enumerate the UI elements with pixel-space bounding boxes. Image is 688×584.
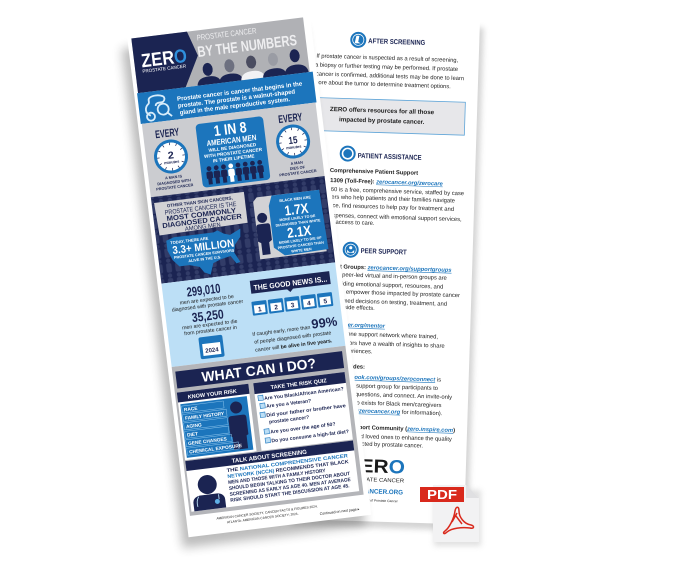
- stat: 299,010 diagnosed: 299,010: [186, 281, 221, 300]
- text block: support groups: to make informed decisions on testing, treatment, and: [309, 297, 447, 308]
- stats: 1.7x and 2.1x: 2.1X: [286, 222, 313, 241]
- calendar row: 1 to 5 years: [251, 292, 333, 316]
- icon: man silhouette: [255, 212, 274, 255]
- text block: prostate definition: Prostate cancer is cancer that begins in the: [177, 80, 303, 103]
- intro band: [137, 72, 317, 124]
- text block: screening recommendation: NETWORK (NCCN) RECOMMENDS THAT BLACK: [227, 459, 349, 480]
- light blue panel: statistics: [161, 262, 345, 367]
- checkboxes: [258, 395, 271, 443]
- text block: patient support: expenses, connect with emotional support services,: [329, 213, 462, 223]
- callout: most commonly diagnosed: OTHER THAN SKIN CANCERS,: [167, 195, 233, 208]
- icon: peer support: [342, 241, 359, 258]
- panel: know your risk: KNOW YOUR RISK: [187, 389, 237, 401]
- stats: 1.7x and 2.1x: DIAGNOSED THAN WHITE: [275, 218, 321, 228]
- logo: ZERO hexagon: [131, 31, 202, 93]
- stat: every 2 minutes: A MAN IS: [165, 174, 183, 180]
- banner: the good news is: [250, 271, 331, 297]
- icon: PDF document: [420, 485, 481, 546]
- text block: prostate definition: prostate. The prostate is a walnut-shaped: [178, 88, 296, 110]
- stat: every 2 minutes: PROSTATE CANCER: [156, 183, 194, 192]
- quiz questions: Are You Black/African American?: [264, 386, 344, 402]
- text block: screening recommendation: [226, 453, 352, 504]
- panel: talk about screening: [185, 440, 359, 512]
- callout: ZERO offers resources: [317, 98, 465, 135]
- calendar row: 1 to 5 years: 4: [307, 300, 312, 308]
- icon: man silhouette: [226, 400, 250, 450]
- list: risk factors: AGING: [186, 422, 202, 430]
- text block: inspire community: [309, 424, 455, 451]
- text block: support groups: providing emotional support, resources, and: [330, 281, 443, 291]
- text block: online guides: a private support group for participants to: [332, 383, 438, 392]
- stats: 1.7x and 2.1x: MORE LIKELY TO BE: [279, 214, 316, 222]
- text block: mentor: zerocancer.org/mentor: [321, 322, 386, 330]
- map: 3.3 million survivors: 3.3+ MILLION: [172, 238, 235, 257]
- panel: what can I do: [172, 346, 364, 516]
- text block: online guides: (email info@zerocancer.org for information).: [325, 407, 443, 417]
- stats: 1.7x and 2.1x: MORE LIKELY TO DIE OF: [279, 236, 323, 245]
- stat: every 2 minutes: EVERY: [155, 126, 180, 141]
- icon: prostate gland: [144, 94, 172, 121]
- icon: acrobat symbol: [444, 507, 474, 534]
- text block: screening recommendation: SHOULD BEGIN TALKING TO THEIR DOCTOR ABOUT: [229, 471, 350, 492]
- calendar row: 1 to 5 years: 2: [274, 304, 279, 312]
- heading: patient assistance: PATIENT ASSISTANCE: [358, 153, 422, 162]
- callout: most commonly diagnosed: PROSTATE CANCER IS THE: [164, 201, 237, 217]
- text block: after screening: If prostate cancer is suspected as a result of screening,: [316, 54, 459, 64]
- text block: screening recommendation: MEN AND THOSE WITH A FAMILY HISTORY: [228, 468, 326, 486]
- stat: 1 in 8 american men: WILL BE DIAGNOSED: [208, 142, 257, 153]
- panel: take the risk quiz: [253, 372, 353, 451]
- stat: 1 in 8 american men: IN THEIR LIFETIME: [213, 153, 255, 163]
- text block: online guides: group exists for Black men/caregivers: [345, 400, 442, 409]
- panel: know your risk: [177, 384, 257, 460]
- stat: 1 in 8 american men: WITH PROSTATE CANCER: [204, 147, 263, 159]
- list: risk factors: DIET: [187, 431, 198, 439]
- text block: prostate definition: gland in the male reproductive system.: [179, 96, 291, 117]
- text block: screening recommendation: THE NATIONAL COMPREHENSIVE CANCER: [226, 453, 349, 474]
- text block: inspire community: of life of those affected by prostate cancer.: [314, 440, 424, 450]
- stats panel: [142, 103, 325, 198]
- text block: patient support: insurance, find resources to help pay for treatment and: [313, 203, 454, 213]
- logo: ZERO back page: ZERO: [347, 456, 405, 479]
- logo: ZERO back page: [336, 455, 405, 503]
- text block: online guides: facebook.com/groups/zeroconnect is: [339, 374, 441, 384]
- stat: every 15 minutes: PROSTATE CANCER: [279, 169, 317, 177]
- panel: take the risk quiz: TAKE THE RISK QUIZ: [270, 378, 328, 391]
- text block: mentor: from their experiences.: [313, 348, 373, 355]
- logo: ZERO back page: ©2024 ZERO The End of Prostate Cancer: [336, 497, 399, 503]
- footer: sources: [216, 499, 360, 529]
- list: risk factors: GENE CHANGES: [188, 436, 228, 447]
- text block: patient support: and access to care.: [324, 219, 375, 227]
- title: [195, 21, 298, 61]
- quiz questions: Did your father or brother have: [266, 403, 346, 419]
- header panel: [131, 17, 310, 93]
- text block: support groups: Our peer-led virtual and in-person groups are: [331, 272, 447, 282]
- callout: most commonly diagnosed: AMONG MEN: [185, 223, 221, 233]
- text block: after screening: [314, 53, 465, 91]
- quiz questions: Are you over the age of 50?: [270, 422, 336, 435]
- stat: every 15 minutes: A MAN: [290, 160, 303, 166]
- stat: every 2 minutes: minutes: [164, 158, 180, 165]
- logo: ZERO hexagon: ZERO: [140, 46, 188, 72]
- stat: 1 in 8 american men: AMERICAN MEN: [206, 133, 257, 148]
- logo: ZERO hexagon: PROSTATE CANCER: [142, 63, 187, 74]
- stat: 299,010 diagnosed: men are expected to be: [179, 294, 234, 307]
- stat: 35,250 deaths: men are expected to die: [182, 319, 238, 331]
- stat: every 15 minutes: minutes: [286, 143, 302, 150]
- text block: patient support: ZERO360: Comprehensive Patient Support: [300, 167, 418, 177]
- calendar row: 1 to 5 years: 5: [323, 298, 328, 306]
- text block: patient support: managers who help patients and their families navigate: [313, 194, 455, 204]
- heading: peer support: PEER SUPPORT: [361, 248, 407, 256]
- text block: online guides: ask questions, and connect. An invite-only: [344, 392, 452, 401]
- callout: ZERO offers resources: ZERO offers resources for all those: [330, 106, 435, 116]
- icon: calendar 2024: 2024: [205, 347, 220, 355]
- heading: what can I do: WHAT CAN I DO?: [201, 355, 317, 385]
- text block: screening recommendation: SCREENING AS EARLY AS AGE 40. MEN AT AVERAGE: [229, 477, 352, 498]
- stat: 299,010 diagnosed: [169, 278, 244, 314]
- text block: 99 percent survival: cancer will be alive in five years.: [255, 338, 333, 354]
- stat: 299,010 diagnosed: diagnosed with prostate cancer: [172, 299, 244, 314]
- text block: inspire community: ZERO Inspire Support Community (zero.inspire.com): [309, 424, 455, 434]
- list: risk factors: [182, 399, 243, 456]
- map: 3.3 million survivors: [166, 228, 245, 279]
- stat: 35,250 deaths: from prostate cancer in: [184, 325, 237, 337]
- panel: talk about screening: TALK ABOUT SCREENING: [231, 450, 308, 465]
- footer: sources: ATLANTA: AMERICAN CANCER SOCIETY; 2024.: [227, 512, 299, 524]
- stats: 1.7x and 2.1x: WHITE MEN: [291, 247, 312, 254]
- stat: 35,250 deaths: [180, 305, 239, 337]
- stats: 1.7x and 2.1x: 1.7X: [283, 200, 310, 219]
- stat: every 15 minutes: 15: [288, 135, 299, 147]
- callout: most commonly diagnosed: [154, 192, 248, 236]
- text block: support groups: Support Groups: zerocancer.org/supportgroups: [319, 264, 452, 274]
- stat: 1 in 8 american men: 1 IN 8: [213, 119, 248, 140]
- icon: calendar 2024: [198, 335, 225, 359]
- quiz questions: Are you a Veteran?: [266, 398, 312, 410]
- calendar row: 1 to 5 years: 1: [258, 306, 262, 314]
- stat: every 2 minutes: [149, 125, 194, 192]
- navy panel: incidence: [151, 176, 335, 284]
- stat: every 15 minutes: [272, 110, 317, 177]
- text block: screening recommendation: RISK SHOULD START THE DISCUSSION AT AGE 45.: [230, 483, 350, 504]
- front sheet: by the numbers: [120, 11, 372, 548]
- icon: after screening microscope: [350, 32, 367, 48]
- map: 3.3 million survivors: TODAY, THERE ARE: [170, 236, 209, 245]
- stat: every 15 minutes: EVERY: [278, 111, 303, 126]
- calendar row: 1 to 5 years: 3: [290, 302, 295, 310]
- people row: one in eight highlighted: [206, 160, 265, 185]
- text block: patient support: 1-844-244-1309 (Toll-Free): zerocancer.org/zerocare: [302, 177, 444, 188]
- quiz questions: [264, 386, 350, 445]
- list: risk factors: FAMILY HISTORY: [185, 411, 225, 422]
- portraits: five men: [195, 48, 309, 86]
- stats: 1.7x and 2.1x: BLACK MEN ARE: [279, 195, 312, 203]
- stat: 1 in 8 american men: [195, 116, 271, 188]
- text block: after screening: cancer is confirmed, additional tests may be done to learn: [316, 72, 464, 82]
- text block: 99 percent survival: of people diagnosed with prostate: [254, 330, 332, 346]
- back sheet: resources page: [284, 16, 484, 531]
- text block: 99 percent survival: [251, 314, 340, 354]
- callout: most commonly diagnosed: MOST COMMONLY: [166, 207, 237, 223]
- stats: 1.7x and 2.1x: PROSTATE CANCER THAN: [278, 241, 324, 250]
- text block: support groups: [309, 263, 461, 315]
- heading: after screening: AFTER SCREENING: [368, 38, 426, 47]
- map: 3.3 million survivors: PROSTATE CANCER SURVIVORS: [174, 248, 235, 260]
- footer: sources: AMERICAN CANCER SOCIETY, CANCER FACTS & FIGURES 2024.: [216, 504, 318, 521]
- title: BY THE NUMBERS: [197, 32, 298, 61]
- text block: support groups: and side effects.: [333, 305, 375, 312]
- title: PROSTATE CANCER: [196, 26, 257, 42]
- icon: doctor: [190, 473, 226, 511]
- text block: 99 percent survival: If caught early, more than 99%: [251, 314, 339, 339]
- icon: patient assistance: [339, 145, 356, 162]
- text block: support groups: empower those impacted by prostate cancer: [346, 290, 460, 299]
- panel: black men risk: [253, 189, 329, 259]
- stat: every 15 minutes: DIES OF: [290, 165, 306, 171]
- list: risk factors: CHEMICAL EXPOSURE: [189, 443, 243, 455]
- callout: ZERO offers resources: impacted by prostate cancer.: [339, 116, 425, 126]
- footer: sources: Continued on next page ▸: [319, 507, 360, 516]
- map: 3.3 million survivors: ALIVE IN THE U.S.: [188, 255, 221, 263]
- stat: 35,250 deaths: 35,250: [191, 306, 224, 325]
- list: risk factors: RACE: [184, 406, 199, 413]
- text block: mentor: volunteer mentors have a wealth of insights to share: [311, 339, 445, 350]
- stat: every 2 minutes: DIAGNOSED WITH: [157, 178, 191, 186]
- stat: every 2 minutes: 2: [167, 150, 175, 162]
- text block: after screening: more about the tumor to determine treatment options.: [314, 80, 451, 90]
- text block: mentor: [310, 322, 445, 358]
- text block: patient support: [299, 167, 465, 230]
- banner: the good news is: THE GOOD NEWS IS...: [253, 274, 328, 292]
- icon: PDF document: PDF: [427, 487, 457, 502]
- text block: inspire community: For patients and loved ones to enhance the quality: [322, 433, 452, 443]
- text block: online guides: [322, 363, 453, 417]
- text block: after screening: a biopsy or further testing may be performed. If prostate: [315, 62, 458, 73]
- text block: online guides: Online Guides:: [324, 363, 365, 371]
- text block: prostate definition: [177, 80, 305, 117]
- quiz questions: Do you consume a high-fat diet?: [271, 429, 349, 444]
- stats: 1.7x and 2.1x: [268, 189, 329, 257]
- quiz questions: prostate cancer?: [269, 415, 310, 426]
- text block: patient support: ZERO360 is a free, comprehensive service, staffed by case: [311, 186, 464, 197]
- heading: what can I do: [175, 351, 344, 388]
- logo: ZERO back page: PROSTATE CANCER: [346, 477, 404, 484]
- logo: ZERO back page: ZEROCANCER.ORG: [343, 488, 403, 496]
- callout: most commonly diagnosed: DIAGNOSED CANCER: [162, 213, 242, 230]
- text block: mentor: A one-on-one support network where trained,: [322, 331, 438, 341]
